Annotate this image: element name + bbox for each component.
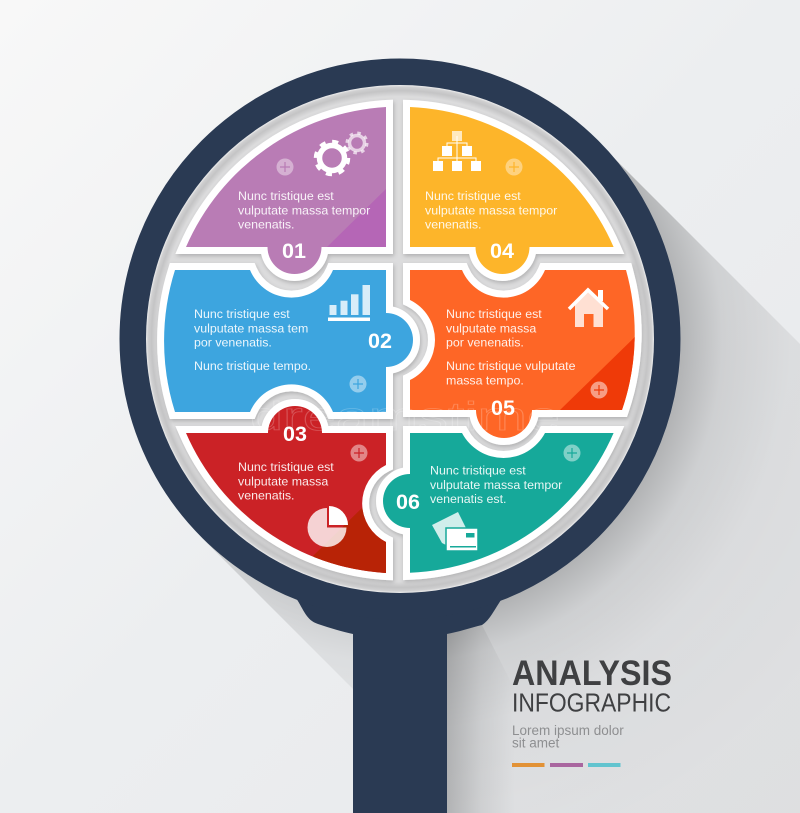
plus 06 — [564, 444, 580, 462]
icon: bar chart — [328, 285, 370, 321]
title: analysis: ANALYSIS — [512, 654, 672, 693]
text 03: venenatis. — [238, 488, 294, 502]
panel 03 red — [186, 406, 400, 580]
text 03: Nunc tristique est — [238, 460, 334, 474]
icon: house — [569, 290, 608, 327]
number 06: 06 — [396, 490, 420, 514]
text 05: Nunc tristique est — [446, 307, 542, 321]
number 05: 05 — [491, 396, 515, 420]
plus 01 — [276, 158, 294, 176]
number 04: 04 — [490, 239, 514, 263]
panel 05 orange — [410, 270, 640, 438]
text 01: Nunc tristique est — [238, 189, 334, 203]
panel 01 purple — [186, 107, 386, 274]
magnifier handle — [296, 597, 503, 813]
text 04: vulputate massa tempor — [425, 204, 557, 218]
number 03: 03 — [283, 422, 307, 446]
icon: pie chart — [308, 506, 348, 547]
text 02: por venenatis. — [194, 336, 272, 350]
text 02: Nunc tristique tempo. — [194, 359, 311, 373]
panel 02 blue — [164, 270, 413, 412]
subtitle: infographic: INFOGRAPHIC — [512, 688, 671, 718]
text 06: vulputate massa tempor — [430, 478, 562, 492]
text 05: por venenatis. — [446, 336, 524, 350]
text 06: Nunc tristique est — [430, 464, 526, 478]
shape 04 — [410, 107, 614, 274]
plus 03 — [350, 444, 368, 462]
plus 02 — [350, 376, 366, 392]
accent 05 — [560, 337, 635, 410]
accent 03 — [313, 508, 386, 573]
text 05: Nunc tristique vulputate — [446, 359, 576, 373]
text 04: Nunc tristique est — [425, 189, 521, 203]
magnifier ring — [133, 72, 667, 606]
text 05: massa tempo. — [446, 374, 524, 388]
shape 02 — [164, 270, 413, 412]
long shadow of magnifier — [202, 142, 800, 813]
text 02: vulputate massa tem — [194, 322, 308, 336]
tagline: Lorem ipsum dolor — [512, 723, 624, 738]
text 01: venenatis. — [238, 218, 294, 232]
shape 05 — [410, 270, 635, 438]
text 04: venenatis. — [425, 218, 481, 232]
plus 04 — [506, 158, 522, 176]
shape 03 — [186, 406, 386, 573]
tagline: sit amet — [512, 736, 560, 750]
accent 01 — [327, 189, 386, 247]
title block — [512, 654, 672, 767]
colour bars — [512, 763, 620, 767]
panel 06 teal — [383, 433, 614, 573]
text 03: vulputate massa — [238, 474, 328, 488]
text 06: venenatis est. — [430, 492, 506, 506]
text 05: vulputate massa — [446, 322, 536, 336]
text 01: vulputate massa tempor — [238, 204, 370, 218]
number 02: 02 — [368, 329, 392, 353]
shape 06 — [383, 433, 614, 573]
panel 04 yellow — [410, 107, 614, 274]
watermark: dreamstime — [250, 395, 560, 439]
plus 05 — [590, 382, 608, 398]
icon: gears — [316, 133, 367, 174]
text 02: Nunc tristique est — [194, 307, 290, 321]
icon: org chart — [433, 131, 481, 171]
number 01: 01 — [282, 239, 306, 263]
lens surface — [146, 85, 654, 593]
icon: cards — [432, 512, 478, 551]
shape 01 — [186, 107, 386, 274]
